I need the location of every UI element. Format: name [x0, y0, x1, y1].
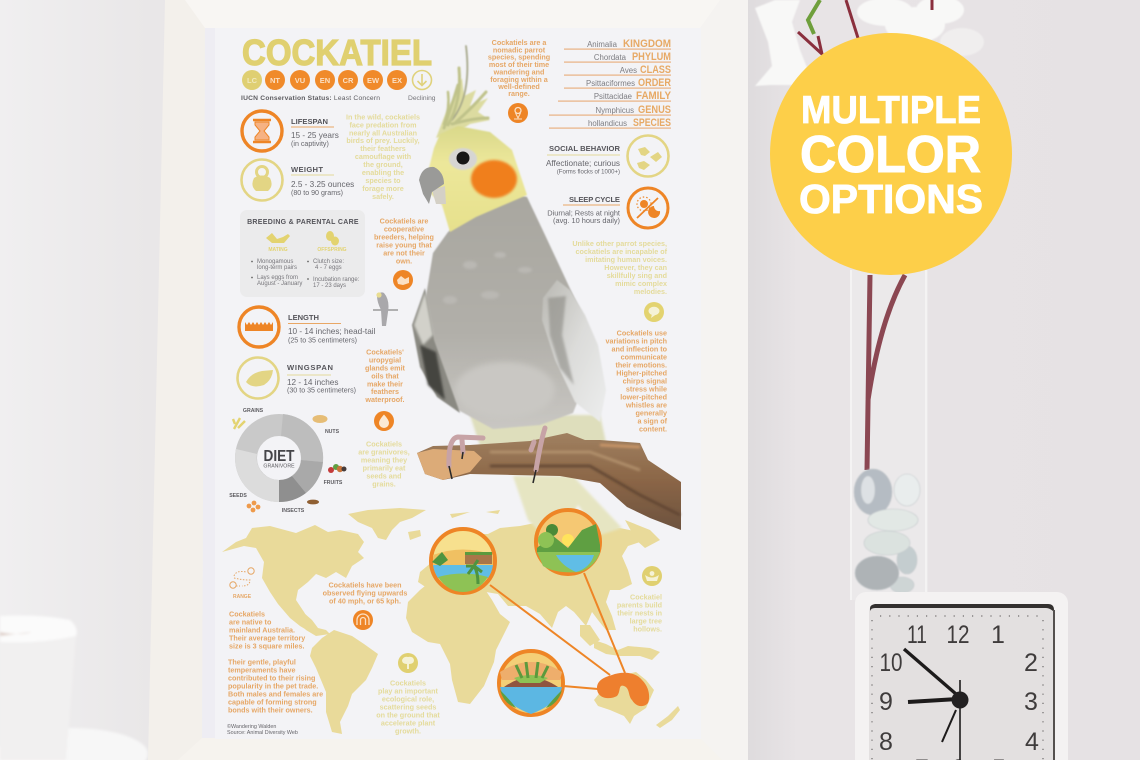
icon: insect: [307, 500, 319, 504]
text: communication: [605, 328, 668, 434]
offspring facts: [307, 259, 360, 289]
text: flight speed: of 40 mph, or 65 kph.: [329, 596, 401, 606]
icon: tree: [398, 653, 418, 673]
australia range blob: [597, 673, 649, 706]
text: communication: variations in pitch: [605, 336, 667, 346]
conservation status badges: VU: [295, 76, 305, 85]
taxonomy table: Nymphicus: [595, 106, 634, 115]
length stat: 10 - 14 inches; head-tail: [288, 327, 376, 336]
taxonomy table: ORDER: [638, 77, 671, 89]
text: predation: the ground,: [363, 160, 403, 169]
text: cooperative breeders: Cockatiels are: [380, 216, 428, 226]
text: pet trade: temperaments have: [228, 666, 296, 674]
sleep cycle stat: SLEEP CYCLE: [569, 195, 620, 204]
icon: flock of birds: [628, 136, 668, 176]
declining trend icon: [412, 70, 432, 90]
offspring facts: Clutch size:: [313, 259, 344, 265]
length stat: (25 to 35 centimeters): [288, 336, 357, 344]
text: communication: Higher-pitched: [616, 368, 667, 378]
text: native range: [229, 610, 305, 650]
conservation status badges: NT: [270, 76, 280, 85]
offspring label: OFFSPRING: [317, 247, 347, 253]
taxonomy table: FAMILY: [636, 90, 672, 102]
text: nomadic: species, spending: [488, 52, 550, 62]
text: predation: enabling the: [362, 168, 404, 177]
clock numerals: 12: [946, 621, 970, 649]
text: ecological role: on the ground that: [376, 710, 440, 720]
sleep cycle stat: Diurnal; Rests at night: [547, 208, 620, 218]
taxonomy table: CLASS: [640, 64, 671, 76]
text: vocal ability: cockatiels are incapable of: [576, 247, 668, 256]
sleep cycle stat: (avg. 10 hours daily): [553, 216, 620, 225]
mating facts: Lays eggs from: [257, 275, 298, 281]
lifespan stat: LIFESPAN: [291, 117, 328, 126]
text: flight speed: observed flying upwards: [323, 588, 407, 598]
text: nomadic: nomadic parrot: [493, 46, 546, 54]
text: nests: large tree: [630, 616, 662, 626]
icon: seeds: [247, 501, 260, 512]
text: flight speed: [323, 580, 407, 606]
conservation status badges: EX: [392, 76, 402, 85]
wingspan stat: [287, 363, 356, 394]
clock numerals: 11: [907, 621, 927, 649]
icon: eggs badge: [393, 270, 413, 290]
bird body: [420, 190, 590, 429]
text: uropygial glands: [364, 348, 406, 404]
social behavior stat: Affectionate; curious: [546, 159, 620, 168]
length stat: [288, 313, 376, 344]
diet labels: [229, 408, 343, 514]
lower beak: [432, 186, 446, 204]
taxonomy table: Psittaciformes: [586, 79, 635, 88]
claws: [449, 452, 536, 483]
badge: multiple color options: [770, 33, 1012, 275]
glass stones: [854, 469, 920, 593]
text: ecological role: [376, 678, 440, 736]
declining label: Declining: [408, 95, 436, 102]
icon: wing: [238, 358, 278, 398]
clock numerals: 4: [1025, 728, 1039, 756]
clock hands: [904, 649, 960, 760]
text: granivores: [358, 440, 410, 488]
text: native range: size is 3 square miles.: [229, 642, 305, 650]
text: nomadic: most of their time: [489, 60, 549, 69]
badge: multiple color options: OPTIONS: [799, 176, 983, 222]
text: uropygial glands: waterproof.: [364, 395, 405, 404]
text: granivores: meaning they: [361, 456, 407, 464]
weight stat: (80 to 90 grams): [291, 189, 343, 197]
text: nomadic: well-defined: [497, 82, 540, 91]
taxonomy table: PHYLUM: [632, 51, 671, 63]
text: cooperative breeders: raise young that: [376, 240, 432, 250]
social behavior stat: [546, 144, 621, 176]
taxonomy table: Animalia: [587, 40, 618, 49]
habitat circle: island: [499, 651, 563, 715]
text: predation: species to: [365, 176, 401, 185]
credits: ©Wandering Walden: [227, 723, 276, 730]
icon: nuts: [312, 415, 328, 423]
text: vocal ability: [572, 239, 668, 296]
text: granivores: grains.: [372, 480, 396, 488]
text: pet trade: popularity in the pet trade.: [228, 682, 318, 690]
text: ecological role: ecological role,: [382, 694, 434, 704]
text: vocal ability: Unlike other parrot species,: [572, 239, 667, 248]
text: communication: whistles are: [625, 400, 667, 410]
taxonomy table: SPECIES: [633, 117, 671, 129]
credits: [227, 723, 298, 736]
panel: breeding and parental care: [240, 210, 365, 297]
text: vocal ability: imitating human voices.: [585, 255, 667, 264]
left wing: [412, 288, 460, 413]
weight stat: 2.5 - 3.25 ounces: [291, 180, 354, 189]
text: predation: [346, 112, 420, 201]
picture frame: [148, 0, 748, 760]
undertail coverts: [470, 415, 607, 447]
badge: multiple color options: COLOR: [800, 126, 981, 184]
branch: [417, 433, 681, 530]
mating facts: August - January: [257, 281, 302, 287]
weight stat: WEIGHT: [291, 165, 323, 174]
diet labels: GRAINS: [243, 408, 264, 414]
taxonomy table: KINGDOM: [623, 38, 671, 50]
offspring facts: Incubation range:: [313, 277, 360, 283]
credits: Source: Animal Diversity Web: [227, 730, 298, 736]
icon: location pin: [508, 103, 528, 123]
diet labels: SEEDS: [229, 493, 247, 499]
mating facts: long-term pairs: [257, 265, 297, 271]
text: communication: lower-pitched: [620, 392, 667, 402]
donut centre label: GRANIVORE: [263, 464, 295, 470]
text: ecological role: scattering seeds: [380, 702, 436, 712]
taxonomy table: [549, 38, 672, 129]
taxonomy table: Chordata: [594, 53, 627, 62]
text: communication: a sign of: [637, 416, 668, 426]
text: predation: face predation from: [349, 120, 417, 130]
upper beak: [419, 167, 444, 204]
icon: sun and moon: [628, 188, 668, 228]
clock: [855, 592, 1068, 760]
text: uropygial glands: make their: [367, 380, 403, 388]
text: ecological role: accelerate plant: [381, 718, 436, 728]
text: communication: stress while: [626, 384, 667, 394]
text: communication: and inflection to: [612, 344, 668, 354]
right wing: [542, 280, 606, 422]
world map: [222, 508, 680, 734]
lifespan stat: (in captivity): [291, 140, 329, 148]
clock numerals: 9: [879, 688, 893, 716]
mating label: MATING: [268, 247, 288, 253]
text: flight speed: Cockatiels have been: [328, 580, 402, 590]
text: pet trade: Their gentle, playful: [228, 658, 296, 666]
sleep cycle stat: [547, 195, 620, 225]
text: communication: generally: [635, 408, 667, 418]
offspring facts: 17 - 23 days: [313, 283, 346, 289]
poster: [215, 28, 701, 739]
text: nomadic: Cockatiels are a: [492, 38, 547, 47]
text: nests: hollows.: [633, 624, 662, 634]
text: ecological role: growth.: [395, 726, 421, 736]
text: nests: [617, 592, 662, 634]
text: uropygial glands: glands emit: [365, 364, 406, 372]
conservation status caption: IUCN Conservation Status: Least Concern: [241, 95, 380, 102]
text: nomadic: foraging within a: [490, 75, 549, 84]
head: [428, 126, 527, 232]
range lines: [490, 573, 625, 689]
badge: multiple color options: MULTIPLE: [801, 89, 981, 132]
text: native range: are native to: [229, 618, 272, 626]
conservation status badges: EW: [367, 76, 380, 85]
coffee cup and saucer: [0, 616, 148, 760]
taxonomy table: GENUS: [638, 104, 671, 116]
clock numerals: 2: [1024, 649, 1038, 677]
text: cooperative breeders: breeders, helping: [374, 232, 434, 242]
text: predation: their feathers: [360, 144, 406, 153]
chest mottling: [443, 252, 532, 304]
clock numerals: 3: [1024, 688, 1038, 716]
wingspan stat: (30 to 35 centimeters): [287, 386, 356, 394]
icon: hourglass: [242, 111, 282, 151]
stems: [867, 275, 905, 470]
branch end cut: [417, 449, 482, 480]
text: pet trade: bonds with their owners.: [228, 706, 313, 714]
text: uropygial glands: feathers: [371, 387, 399, 396]
lifespan stat: 15 - 25 years: [291, 131, 339, 140]
habitat circle: coast and palms: [431, 529, 495, 593]
diet labels: INSECTS: [282, 508, 305, 514]
conservation status badges: CR: [343, 76, 354, 85]
text: cooperative breeders: [374, 216, 434, 266]
mating facts: [251, 259, 302, 287]
icon: speech bubble: [644, 302, 664, 322]
mating facts: Monogamous: [257, 259, 293, 265]
clock numerals: [879, 621, 1039, 760]
text: pet trade: [228, 658, 323, 714]
donut centre label: DIET: [264, 448, 295, 465]
offspring facts: 4 - 7 eggs: [315, 265, 342, 271]
diet labels: FRUITS: [324, 480, 343, 486]
icon: kettlebell: [242, 160, 282, 200]
text: granivores: are granivores,: [358, 448, 410, 456]
icon: range route: [230, 568, 254, 588]
icon: stork: [266, 233, 290, 243]
text: predation: forage more: [362, 184, 404, 193]
social behavior stat: SOCIAL BEHAVIOR: [549, 144, 621, 153]
text: vocal ability: mimic complex: [615, 279, 667, 288]
icon: fruits: [328, 464, 346, 473]
conservation status badges: [242, 70, 407, 90]
text: pet trade: contributed to their rising: [228, 674, 315, 682]
text: vocal ability: However, they can: [604, 263, 667, 272]
title: COCKATIEL: [242, 32, 432, 73]
text: uropygial glands: oils that: [371, 372, 399, 380]
text: ecological role: play an important: [378, 686, 439, 696]
text: pet trade: capable of forming strong: [228, 698, 317, 706]
social behavior stat: (Forms flocks of 1000+): [557, 170, 620, 176]
text: ecological role: Cockatiels: [390, 678, 426, 688]
conservation status badges: EN: [320, 76, 330, 85]
right wing shading: [548, 296, 574, 385]
habitat circle: mountains and lake: [536, 510, 600, 574]
wingspan stat: 12 - 14 inches: [287, 378, 338, 387]
text: nomadic: range.: [508, 89, 530, 98]
text: granivores: Cockatiels: [366, 440, 402, 448]
belly highlights: [455, 362, 555, 418]
text: communication: content.: [639, 424, 667, 434]
text: communication: Cockatiels use: [617, 328, 667, 338]
icon: small bird on perch: [373, 292, 398, 326]
branch texture: [490, 445, 680, 515]
icon: water drop: [374, 411, 394, 431]
range label: RANGE: [233, 594, 252, 600]
icon: grains: [233, 418, 245, 429]
text: predation: camouflage with: [355, 152, 411, 161]
vase: [850, 270, 928, 600]
bird photo: cockatiel on branch: [412, 46, 681, 540]
text: predation: safely.: [372, 192, 394, 201]
text: cooperative breeders: are not their: [383, 248, 425, 258]
length stat: LENGTH: [288, 313, 319, 322]
text: native range: Their average territory: [229, 634, 305, 642]
text: pet trade: Both males and females are: [228, 690, 323, 698]
weight stat: [291, 165, 354, 197]
text: nomadic: [488, 38, 550, 98]
clock numerals: 10: [880, 649, 902, 677]
icon: speedometer: [353, 610, 373, 630]
taxonomy table: Psittacidae: [594, 92, 632, 101]
text: uropygial glands: Cockatiels': [366, 348, 404, 356]
text: nomadic: wandering and: [493, 68, 544, 76]
clock hub: [952, 692, 968, 708]
icon: eggs: [326, 231, 339, 246]
taxonomy table: Aves: [620, 66, 637, 75]
crest: [436, 46, 490, 138]
text: uropygial glands: uropygial: [369, 356, 401, 364]
tail feathers: [513, 476, 622, 540]
orange cheek: [471, 160, 517, 198]
lifespan stat: [291, 117, 339, 148]
text: nests: Cockatiel: [630, 592, 662, 602]
text: granivores: seeds and: [366, 472, 402, 480]
icon: ruler: [239, 307, 279, 347]
text: vocal ability: melodies.: [634, 287, 667, 296]
clock numerals: 8: [879, 728, 893, 756]
flowers: [755, 0, 984, 600]
text: communication: communicate: [621, 352, 667, 362]
eye ring: [449, 148, 477, 170]
text: communication: their emotions.: [615, 360, 667, 370]
text: nests: parents build: [617, 600, 662, 610]
panel heading: BREEDING & PARENTAL CARE: [247, 219, 359, 226]
text: predation: In the wild, cockatiels: [346, 112, 420, 122]
wingspan stat: WINGSPAN: [287, 363, 333, 372]
feet: [449, 428, 545, 470]
text: vocal ability: skillfully sing and: [607, 271, 667, 280]
text: predation: nearly all Australian: [349, 128, 417, 138]
diet labels: NUTS: [325, 429, 340, 435]
text: communication: chirps signal: [623, 376, 667, 386]
text: nests: their nests in: [617, 608, 662, 618]
eye: [456, 152, 470, 164]
taxonomy table: hollandicus: [588, 119, 627, 128]
text: granivores: primarily eat: [363, 464, 406, 472]
diet donut chart: [235, 414, 323, 502]
text: cooperative breeders: own.: [396, 256, 412, 266]
clock numerals: 1: [991, 621, 1005, 649]
text: native range: mainland Australia.: [229, 626, 295, 634]
conservation status badges: LC: [247, 76, 258, 85]
text: cooperative breeders: cooperative: [384, 224, 424, 234]
text: native range: Cockatiels: [229, 610, 265, 618]
text: predation: birds of prey. Luckily,: [346, 136, 420, 145]
icon: nest: [642, 566, 662, 586]
